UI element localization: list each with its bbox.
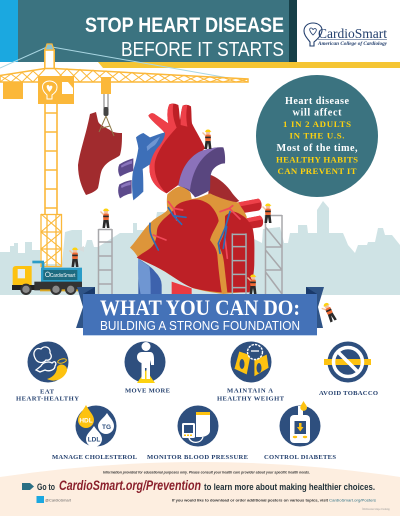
truck xyxy=(12,261,82,295)
statistic circle: Heart disease xyxy=(285,96,349,107)
call to action: CardioSmart.org/Prevention xyxy=(59,478,201,493)
statistic circle: HEALTHY HABITS xyxy=(276,155,358,165)
statistic circle: CAN PREVENT IT xyxy=(278,166,357,176)
icon: move more xyxy=(124,342,166,383)
ladder on heart xyxy=(232,233,246,294)
tall ladder xyxy=(98,229,112,295)
label: maintain a healthy weight xyxy=(217,388,285,403)
label: eat heart-healthy: EAT xyxy=(40,388,55,395)
posters note: CardioSmart.org/Posters xyxy=(329,498,376,502)
worker: on scaffold xyxy=(262,203,272,223)
icon: maintain a healthy weight xyxy=(230,342,272,382)
footer panel xyxy=(0,462,400,516)
logo: CardioSmart xyxy=(304,23,388,47)
worker: with megaphone xyxy=(70,246,84,267)
icon: avoid tobacco xyxy=(324,342,371,382)
purple arch xyxy=(178,147,225,197)
dark red atrium xyxy=(208,174,239,207)
ribbon banner xyxy=(76,287,324,336)
label: avoid tobacco: AVOID TOBACCO xyxy=(319,390,378,397)
label: move more: MOVE MORE xyxy=(125,388,171,395)
crane hook and wall piece xyxy=(78,94,122,195)
statistic circle: Most of the time, xyxy=(276,143,358,154)
label: eat heart-healthy: HEART-HEALTHY xyxy=(16,396,79,403)
label: control diabetes: CONTROL DIABETES xyxy=(264,454,336,461)
icon: manage cholesterol: HDL xyxy=(79,418,93,424)
city skyline xyxy=(0,201,400,295)
disclaimer: Information provided for educational purposes only. Please consult your health care provider about your specific health needs. xyxy=(103,470,310,474)
twitter handle: @CardioSmart xyxy=(45,498,72,502)
crane xyxy=(0,44,248,267)
label: manage cholesterol: MANAGE CHOLESTEROL xyxy=(52,454,138,461)
title xyxy=(85,13,284,61)
right pulmonary veins xyxy=(238,199,263,229)
statistic circle: 1 IN 2 ADULTS xyxy=(283,119,351,129)
icon: arrow tag xyxy=(22,483,34,490)
title: BEFORE IT STARTS xyxy=(121,38,284,61)
logo: CardioSmart: American College of Cardiology xyxy=(317,41,388,47)
icon: manage cholesterol: TG xyxy=(102,424,111,431)
header banner xyxy=(0,0,400,68)
crane cables xyxy=(0,47,240,80)
ribbon banner: BUILDING A STRONG FOUNDATION xyxy=(100,319,300,333)
worker: pushing banner xyxy=(320,302,337,323)
icon: monitor blood pressure xyxy=(178,406,218,446)
statistic circle: will affect xyxy=(292,108,342,118)
crane cabin with bulb xyxy=(3,76,111,104)
label: maintain a healthy weight: HEALTHY WEIGHT xyxy=(217,396,285,403)
left ventricle xyxy=(137,199,222,292)
title: STOP HEART DISEASE xyxy=(85,13,284,37)
icon: twitter xyxy=(36,496,44,503)
call to action: to learn more about making healthier choices. xyxy=(204,482,375,492)
blue vena cava xyxy=(132,132,165,200)
call to action xyxy=(37,478,375,493)
logo: CardioSmart: CardioSmart xyxy=(318,27,387,42)
worker: on top of heart xyxy=(202,129,212,149)
heart under construction xyxy=(118,103,263,295)
label: eat heart-healthy xyxy=(16,388,79,403)
statistic circle: IN THE U.S. xyxy=(290,131,344,141)
worker: at heart ladder xyxy=(248,274,257,294)
statistic circle xyxy=(256,75,378,197)
scaffold xyxy=(266,215,282,295)
call to action: Go to xyxy=(37,482,55,492)
icon: control diabetes xyxy=(280,401,320,446)
icon: eat heart-healthy xyxy=(28,342,68,382)
ribbon banner: WHAT YOU CAN DO: xyxy=(100,295,300,320)
icon: manage cholesterol xyxy=(76,405,116,447)
icon: manage cholesterol: LDL xyxy=(88,436,100,444)
label: maintain a healthy weight: MAINTAIN A xyxy=(227,388,273,395)
lower vessels xyxy=(138,258,192,295)
orange fat layer xyxy=(130,186,250,294)
worker: on tall ladder xyxy=(100,208,110,228)
right ventricle xyxy=(220,212,254,292)
heart wall panel xyxy=(78,112,122,195)
label: monitor blood pressure: MONITOR BLOOD PRESSURE xyxy=(147,454,249,461)
posters note: If you would like to download or order additional posters on various topics, visit xyxy=(172,498,329,502)
truck: CardioSmart xyxy=(50,273,76,279)
purple pipes xyxy=(118,158,133,198)
aorta xyxy=(148,103,205,193)
coronary vessels xyxy=(150,202,240,258)
